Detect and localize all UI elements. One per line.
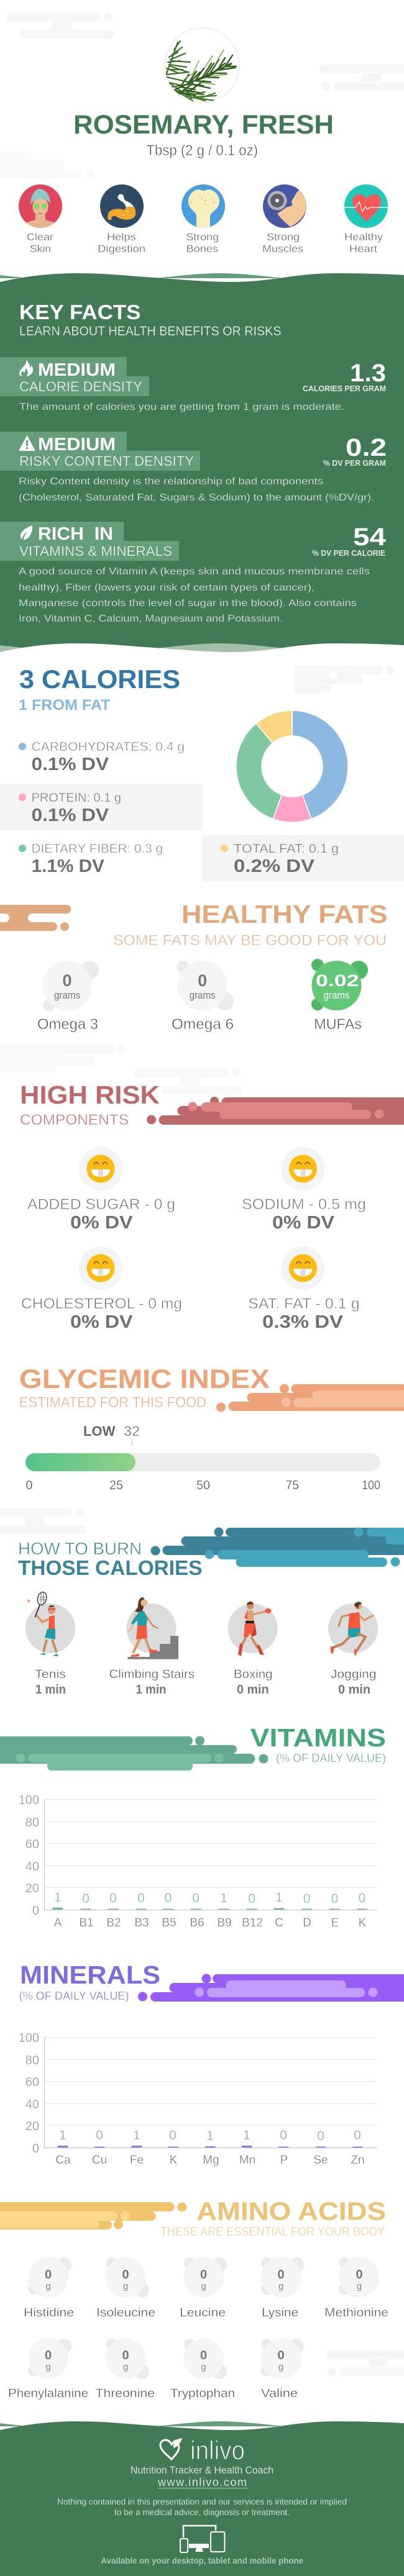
website: www.inlivo.com: [157, 2476, 247, 2488]
bar chart: minerals: 0: [169, 2128, 177, 2143]
bar chart: vitamins: 1: [220, 1891, 227, 1905]
icon: warning triangle: [19, 435, 35, 451]
macro: protein: [19, 791, 121, 825]
bar chart: vitamins: 80: [25, 1816, 39, 1830]
exercise: jogging: 0 min: [338, 1683, 370, 1697]
bar chart: vitamins: 0: [192, 1891, 200, 1905]
label: heart: [344, 231, 383, 255]
bar chart: vitamins: B6: [190, 1916, 204, 1930]
macro: protein: PROTEIN: 0.1 g: [32, 791, 121, 805]
fact: rich in vitamins and minerals: A good source of Vitamin A (keeps skin and mucous membrane cells: [19, 566, 370, 577]
heading: how to burn: [18, 1539, 203, 1579]
heading: glycemic index: GLYCEMIC INDEX: [19, 1364, 270, 1394]
disclaimer: Nothing contained in this presentation and our services is intended or implied: [57, 2497, 347, 2506]
fact: risky content density: [0, 432, 387, 503]
fact: calorie density: MEDIUM: [38, 360, 116, 380]
macro: total fat: TOTAL FAT: 0.1 g: [234, 842, 339, 856]
fat: MUFAs: [311, 959, 368, 1033]
amino acids grid: g: [45, 2362, 51, 2372]
bar chart: minerals: 0: [280, 2128, 287, 2143]
fact: risky content density: Risky Content density is the relationship of bad components: [19, 476, 323, 487]
disclaimer: to be a medical advice, diagnosis or treatment.: [114, 2507, 290, 2517]
bar chart: minerals: 20: [25, 2120, 39, 2133]
bar chart: minerals: 40: [25, 2098, 39, 2111]
heading: 3 calories: 3 CALORIES: [19, 664, 180, 694]
exercise: tennis: [25, 1591, 75, 1697]
bar chart: vitamins: D: [303, 1916, 311, 1930]
bar chart: vitamins: 1: [275, 1890, 283, 1905]
amino acids grid: 0: [277, 2349, 285, 2362]
bar chart: vitamins: 0: [303, 1892, 310, 1906]
title: ROSEMARY, FRESH: [73, 110, 334, 140]
footer: [0, 2421, 404, 2576]
exercise: boxing: 0 min: [237, 1683, 269, 1697]
gauge: glycemic index: 0: [26, 1479, 32, 1492]
bar chart: minerals: 1: [206, 2129, 214, 2143]
risk item: added sugar: [27, 1147, 175, 1233]
amino acids grid: g: [201, 2362, 206, 2372]
label: muscles: Strong: [267, 231, 300, 243]
amino acids grid: g: [123, 2362, 128, 2372]
fact: rich in vitamins and minerals: % DV PER CALORIE: [312, 548, 385, 558]
fat: omega 6: grams: [190, 989, 216, 1001]
icon: smiley: [87, 1155, 114, 1182]
gauge: glycemic index: 32: [124, 1423, 140, 1439]
panel backgrounds: [0, 784, 404, 881]
bar chart: minerals: 100: [19, 2031, 39, 2045]
icon: flame: [19, 360, 33, 376]
amino acids grid: Histidine: [24, 2306, 74, 2320]
heading: how to burn: HOW TO BURN: [18, 1539, 142, 1558]
icon: tennis player: [27, 1591, 58, 1656]
bar chart: vitamins: B5: [162, 1916, 177, 1930]
bar chart: vitamins: 0: [331, 1892, 338, 1906]
subheading: components: COMPONENTS: [20, 1112, 129, 1128]
risk item: added sugar: 0% DV: [70, 1213, 133, 1233]
label: heart: Healthy: [344, 231, 383, 243]
fat: omega 6: Omega 6: [172, 1016, 234, 1033]
bar chart: vitamins: 0: [32, 1904, 39, 1918]
bar chart: minerals: 60: [25, 2075, 39, 2089]
fat: MUFAs: grams: [323, 989, 349, 1001]
bar chart: minerals: P: [280, 2154, 288, 2167]
amino acids grid: g: [278, 2281, 283, 2292]
fact: calorie density: CALORIE DENSITY: [19, 379, 142, 394]
decorative bars: amino acids: [0, 2202, 186, 2229]
icon: smiley: [289, 1254, 317, 1282]
macro: total fat: 0.2% DV: [234, 856, 315, 876]
amino acids grid: g: [201, 2281, 206, 2292]
macro: carbohydrates: 0.1% DV: [32, 755, 109, 774]
bar chart: vitamins: 0: [248, 1892, 255, 1906]
fat: MUFAs: MUFAs: [314, 1016, 362, 1033]
fact: calorie density: [0, 357, 386, 412]
heading: amino acids: AMINO ACIDS: [196, 2197, 386, 2226]
decorative bars: vitamins: [0, 1736, 269, 1771]
risk item: saturated fat: [248, 1246, 359, 1332]
label: bones: Strong: [186, 231, 219, 243]
label: bones: [186, 231, 219, 255]
bar chart: minerals: 80: [25, 2054, 39, 2067]
fact: rich in vitamins and minerals: VITAMINS & MINERALS: [19, 543, 172, 559]
fact: risky content density: (Cholesterol, Saturated Fat, Sugars & Sodium) to the amount (%DV/gr).: [19, 492, 374, 503]
benefits row: [19, 184, 388, 255]
fact: rich in vitamins and minerals: healthy), Fiber (lowers your risk of certain types of cancer),: [19, 583, 314, 593]
availability note: Available on your desktop, tablet and mobile phone: [101, 2556, 303, 2565]
bar chart: vitamins: 0: [137, 1891, 145, 1905]
macro: dietary fiber: 1.1% DV: [32, 856, 105, 876]
amino acids grid: g: [357, 2281, 362, 2292]
logo: inlivo: [160, 2436, 245, 2465]
bar chart: vitamins: B12: [242, 1916, 263, 1930]
heading: healthy fats: HEALTHY FATS: [181, 900, 388, 928]
bar chart: vitamins: K: [359, 1916, 367, 1930]
bar chart: minerals: Mn: [239, 2154, 255, 2167]
bar chart: vitamins: 1: [54, 1890, 62, 1905]
bar chart: minerals: Zn: [351, 2154, 365, 2167]
icon: climbing figure: [127, 1597, 178, 1659]
tagline: Nutrition Tracker & Health Coach: [131, 2464, 273, 2476]
gauge: glycemic index: LOW: [83, 1423, 116, 1439]
exercise: boxing: [227, 1602, 277, 1697]
fact: risky content density: % DV PER GRAM: [323, 458, 386, 468]
amino acids grid: Methionine: [324, 2306, 388, 2320]
icon: smiley: [87, 1254, 114, 1282]
amino acids grid: 0: [200, 2268, 207, 2282]
amino acids grid: Threonine: [96, 2387, 155, 2400]
fact: risky content density: 0.2: [346, 434, 387, 461]
label: digestion: Digestion: [98, 243, 145, 255]
label: heart: Heart: [349, 243, 377, 255]
heading: minerals: MINERALS: [20, 1961, 160, 1989]
amino acids grid: g: [278, 2362, 283, 2372]
bar chart: minerals: 1: [133, 2128, 140, 2143]
decorative bars: minerals: [138, 1974, 404, 2002]
heading: how to burn: THOSE CALORIES: [18, 1556, 203, 1579]
exercise: jogging: Jogging: [331, 1668, 377, 1681]
subheading: minerals: (% OF DAILY VALUE): [19, 1990, 129, 2002]
amino acids grid: Valine: [261, 2387, 298, 2400]
amino acids grid: g: [45, 2281, 51, 2292]
decorative bars: burn calories: [150, 1528, 404, 1567]
bar chart: minerals: Ca: [55, 2154, 71, 2167]
bar chart: vitamins: 100: [19, 1794, 39, 1807]
icon: clear skin: [19, 184, 62, 230]
gauge: glycemic index: [25, 1423, 380, 1492]
icon: jogger: [331, 1602, 374, 1656]
subheading: estimated: ESTIMATED FOR THIS FOOD: [19, 1394, 206, 1411]
label: digestion: [98, 231, 145, 255]
exercise: jogging: [328, 1602, 378, 1697]
risk item: saturated fat: SAT. FAT - 0.1 g: [248, 1295, 359, 1312]
bar chart: vitamins: 60: [25, 1838, 39, 1851]
bar chart: vitamins: 0: [82, 1892, 90, 1906]
bar chart: minerals: 0: [354, 2128, 361, 2143]
icon: smiley: [289, 1155, 317, 1182]
bar chart: minerals: 0: [32, 2142, 39, 2156]
subheading: amino acids: THESE ARE ESSENTIAL FOR YOUR BODY: [160, 2225, 385, 2239]
fact: calorie density: 1.3: [350, 360, 386, 387]
fat: omega 6: [172, 961, 234, 1033]
macro: dietary fiber: [19, 842, 163, 876]
food photo: rosemary sprigs: [165, 28, 239, 102]
serving size: Tbsp (2 g / 0.1 oz): [147, 142, 258, 159]
bar chart: vitamins: B2: [106, 1916, 121, 1930]
exercise: climbing stairs: Climbing Stairs: [109, 1668, 195, 1681]
bar chart: vitamins: 0: [359, 1891, 365, 1905]
fact: rich in vitamins and minerals: 54: [353, 524, 387, 551]
bar chart: vitamins: 0: [109, 1891, 117, 1905]
subheading: vitamins: (% OF DAILY VALUE): [276, 1752, 386, 1764]
amino acids grid: Lysine: [262, 2306, 298, 2320]
macro: carbohydrates: CARBOHYDRATES: 0.4 g: [32, 740, 185, 754]
amino acids grid: 0: [356, 2268, 363, 2282]
panel: key facts: [0, 273, 404, 662]
macro: carbohydrates: [19, 740, 185, 774]
amino acids grid: Isoleucine: [96, 2306, 155, 2320]
amino acids grid: 0: [200, 2349, 207, 2362]
risk item: cholesterol: 0% DV: [70, 1312, 133, 1332]
bar chart: vitamins: [19, 1794, 377, 1930]
bar chart: minerals: Cu: [92, 2154, 107, 2167]
fat: omega 3: grams: [54, 989, 80, 1001]
gauge: glycemic index: 75: [286, 1479, 299, 1492]
bar chart: vitamins: C: [275, 1916, 283, 1930]
label: bones: Bones: [186, 243, 218, 255]
bar chart: vitamins: B3: [134, 1916, 149, 1930]
decorative bars: healthy fats: [0, 905, 71, 931]
icon: boxer: [238, 1602, 271, 1656]
subheading: LEARN ABOUT HEALTH BENEFITS OR RISKS: [19, 324, 281, 338]
icon: devices: [180, 2526, 225, 2552]
label: muscles: Muscles: [262, 243, 303, 255]
amino acids grid: 0: [122, 2268, 129, 2282]
exercise: tennis: Tenis: [35, 1668, 66, 1681]
amino acids grid: Phenylalanine: [8, 2387, 88, 2400]
bar chart: minerals: 0: [317, 2129, 324, 2143]
fact: rich in vitamins and minerals: [0, 522, 387, 624]
exercise: boxing: Boxing: [234, 1668, 272, 1681]
risk item: added sugar: ADDED SUGAR - 0 g: [27, 1196, 175, 1213]
bar chart: vitamins: 0: [165, 1891, 172, 1905]
heading: vitamins: VITAMINS: [250, 1723, 386, 1752]
bar chart: vitamins: B9: [217, 1916, 232, 1930]
bar chart: minerals: Fe: [130, 2154, 144, 2167]
fact: risky content density: MEDIUM: [38, 435, 116, 455]
label: muscles: [262, 231, 303, 255]
macro: protein: 0.1% DV: [32, 805, 109, 825]
amino acids grid: 0: [45, 2349, 52, 2362]
fact: rich in vitamins and minerals: RICH IN: [38, 524, 113, 544]
bar chart: vitamins: 20: [25, 1882, 39, 1895]
fact: risky content density: RISKY CONTENT DENSITY: [19, 453, 194, 469]
macro: dietary fiber: DIETARY FIBER: 0.3 g: [32, 842, 163, 856]
exercise: climbing stairs: 1 min: [135, 1683, 167, 1697]
bar chart: vitamins: A: [54, 1916, 62, 1930]
icon: bones: [181, 184, 225, 230]
amino acids grid: 0: [277, 2268, 285, 2282]
amino acids grid: Tryptophan: [170, 2387, 235, 2400]
bar chart: vitamins: E: [331, 1916, 339, 1930]
risk item: cholesterol: CHOLESTEROL - 0 mg: [21, 1295, 182, 1312]
fact: calorie density: CALORIES PER GRAM: [303, 384, 386, 393]
icon: muscles: [263, 184, 306, 228]
risk item: cholesterol: [21, 1246, 182, 1332]
icon: digestion: [100, 184, 144, 228]
fat: omega 6: 0: [198, 971, 207, 990]
risk item: sodium: SODIUM - 0.5 mg: [242, 1196, 366, 1213]
bar chart: minerals: 1: [59, 2128, 67, 2143]
bar chart: minerals: Se: [313, 2154, 328, 2167]
amino acids grid: 0: [122, 2349, 129, 2362]
bar chart: minerals: [19, 2031, 377, 2167]
heading: key facts: KEY FACTS: [19, 301, 140, 324]
label: clear skin: Clear: [27, 231, 53, 243]
heading: high risk: HIGH RISK: [20, 1081, 160, 1109]
fat: omega 3: 0: [62, 971, 72, 990]
bar chart: minerals: 1: [243, 2128, 250, 2143]
decorative bars: high risk: [147, 1097, 404, 1125]
amino acids grid: [8, 2257, 388, 2400]
fat: MUFAs: 0.02: [316, 971, 359, 990]
decorative bars: glycemic: [216, 1384, 404, 1412]
fat: omega 3: [37, 961, 99, 1033]
gauge: glycemic index: 100: [362, 1479, 380, 1492]
logo: inlivo: inlivo: [190, 2436, 245, 2465]
label: clear skin: Skin: [30, 243, 51, 255]
bar chart: vitamins: B1: [79, 1916, 94, 1930]
risk item: saturated fat: 0.3% DV: [262, 1312, 344, 1332]
gauge: glycemic index: 25: [109, 1479, 123, 1492]
amino acids grid: 0: [45, 2268, 52, 2282]
risk item: sodium: 0% DV: [272, 1213, 335, 1233]
bar chart: minerals: K: [170, 2154, 178, 2167]
fact: rich in vitamins and minerals: Iron, Vitamin C, Calcium, Magnesium and Potassium.: [19, 614, 283, 624]
amino acids grid: g: [123, 2281, 128, 2292]
exercise: tennis: 1 min: [35, 1683, 66, 1697]
donut chart: [236, 710, 348, 822]
fact: rich in vitamins and minerals: Manganese (controls the level of sugar in the blood). Also contains: [19, 598, 357, 609]
icon: heart: [344, 184, 388, 228]
icon: leaf: [21, 525, 32, 540]
fact: calorie density: The amount of calories you are getting from 1 gram is moderate.: [19, 402, 344, 412]
subheading: from fat: 1 FROM FAT: [19, 697, 111, 714]
label: clear skin: [27, 231, 53, 255]
amino acids grid: Leucine: [180, 2306, 226, 2320]
risk item: sodium: [242, 1147, 366, 1233]
macro: total fat: [221, 842, 339, 876]
bar chart: vitamins: 40: [25, 1860, 39, 1874]
subheading: healthy fats: SOME FATS MAY BE GOOD FOR YOU: [113, 932, 387, 949]
bar chart: minerals: 0: [96, 2128, 103, 2143]
gauge: glycemic index: 50: [196, 1479, 210, 1492]
exercise: climbing stairs: [109, 1597, 195, 1697]
label: digestion: Helps: [107, 231, 136, 243]
bar chart: minerals: Mg: [203, 2154, 219, 2167]
fat: omega 3: Omega 3: [37, 1016, 98, 1033]
